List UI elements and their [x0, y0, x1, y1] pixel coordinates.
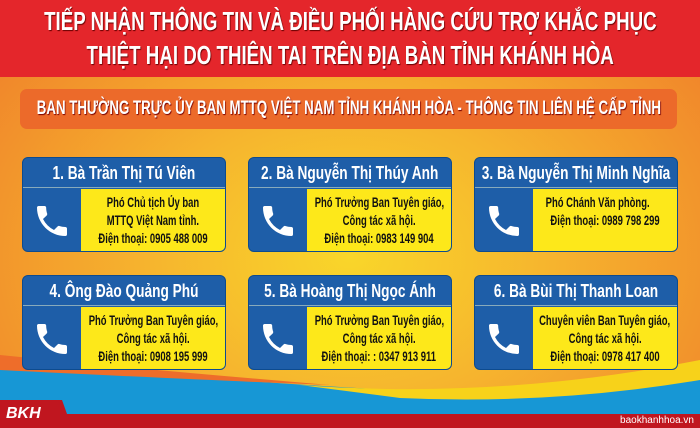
- card 2: Công tác xã hội.: [342, 213, 415, 228]
- subtitle banner: BAN THƯỜNG TRỰC ỦY BAN MTTQ VIỆT NAM TỈNH KHÁNH HÒA - THÔNG TIN LIÊN HỆ CẤP TỈNH: [36, 98, 661, 119]
- title: [0, 0, 700, 77]
- card 2: 2. Bà Nguyễn Thị Thúy Anh: [261, 163, 439, 183]
- footer bar: [0, 414, 700, 428]
- logo BKH: [0, 400, 67, 418]
- card 5: Phó Trưởng Ban Tuyên giáo,: [314, 313, 444, 328]
- card 1: 1. Bà Trần Thị Tú Viên: [53, 163, 195, 183]
- card 4: Phó Trưởng Ban Tuyên giáo,: [88, 313, 218, 328]
- card 3: 3. Bà Nguyễn Thị Minh Nghĩa: [482, 163, 670, 183]
- card 1: Điện thoại: 0905 488 009: [98, 231, 208, 246]
- card 5: Công tác xã hội.: [342, 331, 415, 346]
- card 6: Chuyên viên Ban Tuyên giáo,: [539, 313, 671, 328]
- card 6: Điện thoại: 0978 417 400: [550, 349, 660, 364]
- card 1: MTTQ Việt Nam tỉnh.: [107, 213, 199, 228]
- website: baokhanhhoa.vn: [620, 415, 694, 426]
- logo BKH: BKH: [6, 405, 41, 422]
- card 4: 4. Ông Đào Quảng Phú: [50, 281, 198, 301]
- card 4: Điện thoại: 0908 195 999: [98, 349, 208, 364]
- card 3: Phó Chánh Văn phòng.: [545, 195, 649, 210]
- card 5: 5. Bà Hoàng Thị Ngọc Ánh: [264, 281, 436, 301]
- card 3: Điện thoại: 0989 798 299: [550, 213, 660, 228]
- title: TIẾP NHẬN THÔNG TIN VÀ ĐIỀU PHỐI HÀNG CỨU TRỢ KHẮC PHỤC: [44, 6, 656, 36]
- card 4: Công tác xã hội.: [116, 331, 189, 346]
- card 4: [22, 275, 226, 370]
- subtitle banner: [20, 89, 677, 129]
- card 2: [248, 157, 452, 252]
- card 6: Công tác xã hội.: [568, 331, 641, 346]
- card 1: Phó Chủ tịch Ủy ban: [107, 195, 199, 210]
- card 6: 6. Bà Bùi Thị Thanh Loan: [494, 281, 658, 301]
- card 5: [248, 275, 452, 370]
- card 2: Phó Trưởng Ban Tuyên giáo,: [314, 195, 444, 210]
- card 1: [22, 157, 226, 252]
- card 2: Điện thoại: 0983 149 904: [324, 231, 434, 246]
- card 5: Điện thoại: : 0347 913 911: [322, 349, 436, 364]
- card 6: [474, 275, 678, 370]
- title: THIỆT HẠI DO THIÊN TAI TRÊN ĐỊA BÀN TỈNH KHÁNH HÒA: [86, 40, 614, 70]
- card 3: [474, 157, 678, 252]
